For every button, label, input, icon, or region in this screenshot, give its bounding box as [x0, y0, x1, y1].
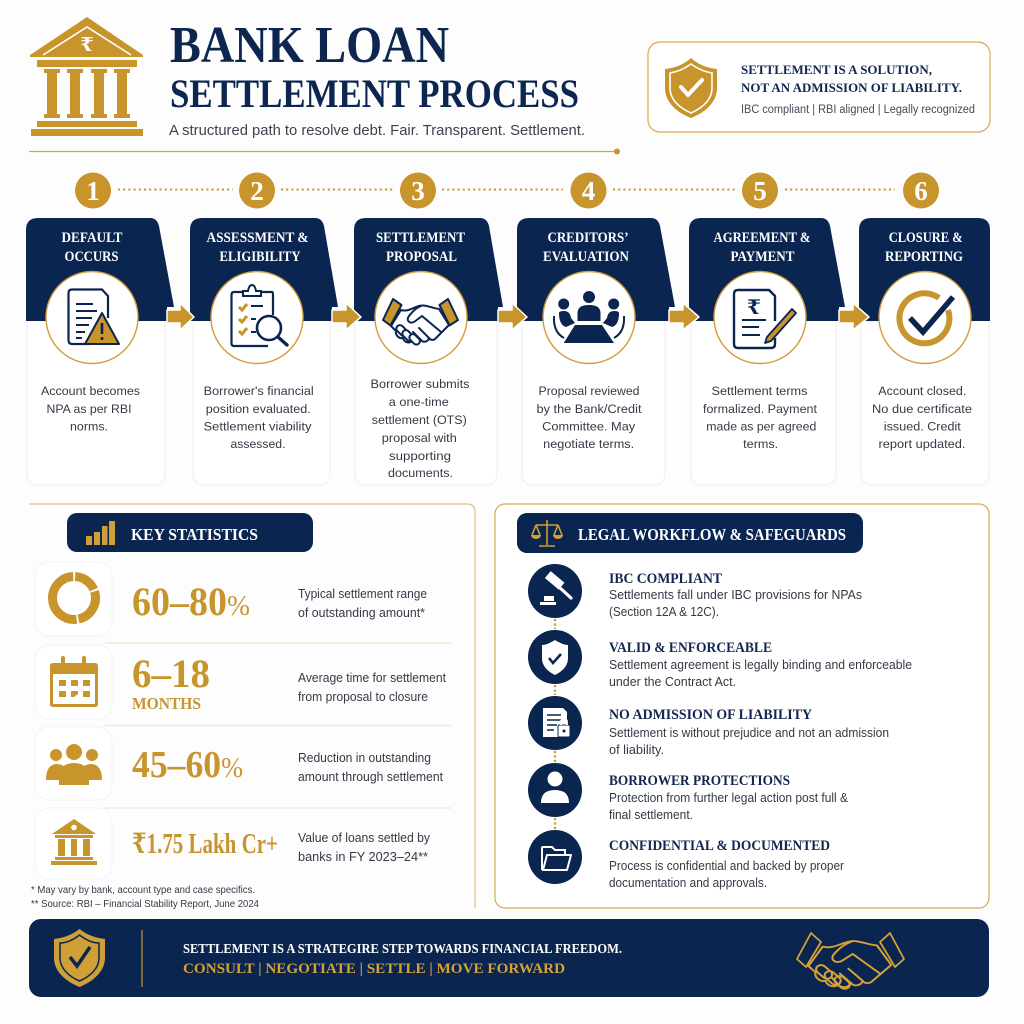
stat: settlement range: of outstanding amount* — [298, 606, 425, 620]
stat: average time — [35, 645, 447, 719]
panel: step 1 default occurs: norms. — [70, 420, 108, 434]
stat: value settled: ₹1.75 Lakh Cr+ — [132, 829, 278, 860]
stat: reduction: 45–60% — [132, 744, 243, 786]
icon: person — [541, 772, 569, 803]
item: IBC compliant: (Section 12A & 12C). — [609, 605, 719, 619]
item: IBC compliant: IBC COMPLIANT — [609, 571, 722, 587]
stat: average time: Average time for settlement — [298, 671, 447, 685]
panel: step 3 settlement proposal: proposal with — [382, 431, 457, 445]
panel: step 3 settlement proposal: settlement (OTS) — [372, 413, 467, 427]
icon: donut — [53, 577, 96, 619]
icon: gold shield — [665, 58, 717, 118]
panel: step 6 closure and reporting: report updated. — [878, 437, 966, 451]
panel: step 1 default occurs: OCCURS — [64, 249, 118, 265]
item: confidential and documented: Process is confidential and backed by proper — [609, 859, 844, 873]
banner — [29, 919, 989, 997]
panel: step 3 settlement proposal: a one-time — [389, 395, 449, 409]
stat: settlement range: 60–80% — [132, 579, 250, 624]
panel: step 5 agreement and payment: terms. — [743, 437, 778, 451]
icon: banner shield — [54, 929, 105, 987]
panel: step 6 closure and reporting: REPORTING — [885, 249, 963, 265]
item: valid and enforceable — [528, 630, 912, 689]
panel: step 4 creditors evaluation: Committee. May — [542, 420, 636, 434]
step numbers — [75, 172, 939, 208]
step numbers: 2 — [250, 176, 264, 206]
icon: rupee document with pen: ₹ — [747, 297, 761, 319]
panel: step 5 agreement and payment: made as per agreed — [706, 420, 816, 434]
banner: SETTLEMENT IS A STRATEGIRE STEP TOWARDS FINANCIAL FREEDOM. — [183, 942, 622, 957]
item: borrower protections: final settlement. — [609, 808, 693, 822]
panel: step 6 closure and reporting — [859, 218, 990, 485]
stat: reduction: amount through settlement — [298, 770, 444, 784]
panel: step 3 settlement proposal: documents. — [388, 466, 453, 480]
item: borrower protections — [528, 763, 849, 822]
icon: meeting table — [554, 291, 624, 343]
item: valid and enforceable: VALID & ENFORCEABLE — [609, 640, 772, 656]
panel: step 4 creditors evaluation: negotiate terms. — [543, 437, 634, 451]
title: SETTLEMENT PROCESS — [170, 71, 579, 116]
stat: average time: MONTHS — [132, 694, 201, 713]
icon: small bank — [51, 819, 97, 865]
panel: step 2 assessment: ASSESSMENT & — [206, 230, 308, 246]
panel: step 3 settlement proposal — [354, 218, 503, 485]
icon: clipboard and magnifier — [232, 285, 287, 346]
stat: settlement range: Typical settlement range — [298, 587, 427, 601]
icon: check in ring — [899, 293, 953, 343]
callout: settlement is a solution — [648, 42, 990, 132]
item: confidential and documented: CONFIDENTIAL & DOCUMENTED — [609, 838, 830, 854]
item: IBC compliant: Settlements fall under IBC provisions for NPAs — [609, 588, 862, 602]
step numbers: 5 — [753, 176, 767, 206]
panel: step 1 default occurs: NPA as per RBI — [46, 402, 132, 416]
panel: step 5 agreement and payment: PAYMENT — [730, 249, 795, 265]
item: borrower protections: Protection from further legal action post full & — [609, 791, 849, 805]
panel: step 4 creditors evaluation: EVALUATION — [543, 249, 629, 265]
icon: bank logo — [30, 17, 143, 136]
panel: step 1 default occurs: DEFAULT — [62, 230, 123, 246]
panel: step 6 closure and reporting: Account closed. — [878, 384, 966, 398]
item: confidential and documented: documentation and approvals. — [609, 876, 767, 890]
callout: settlement is a solution: NOT AN ADMISSION OF LIABILITY. — [741, 80, 962, 95]
stat: reduction — [35, 727, 444, 800]
panel: step 3 settlement proposal: SETTLEMENT — [376, 230, 465, 246]
panel: step 2 assessment: Settlement viability — [204, 420, 312, 434]
icon: calendar — [50, 658, 98, 707]
panel: step 6 closure and reporting: CLOSURE & — [889, 230, 963, 246]
item: borrower protections: BORROWER PROTECTIONS — [609, 773, 790, 789]
icon: rupee document with pen — [734, 290, 796, 348]
stat: value settled — [35, 808, 431, 879]
panel: step 2 assessment: assessed. — [230, 437, 286, 451]
item: valid and enforceable: under the Contract Act. — [609, 675, 736, 689]
item: no admission of liability — [528, 696, 889, 757]
panel: step 1 default occurs — [26, 218, 174, 485]
step numbers: 1 — [86, 176, 100, 206]
panel: step 2 assessment — [190, 218, 338, 485]
icon: handshake — [383, 299, 458, 346]
footnotes: ** Source: RBI – Financial Stability Report, June 2024 — [31, 899, 260, 910]
heading: key statistics: KEY STATISTICS — [131, 525, 258, 544]
header rule — [29, 148, 620, 154]
heading: legal workflow — [517, 513, 863, 553]
arrows between steps — [167, 303, 869, 330]
title: BANK LOAN — [170, 17, 449, 74]
step numbers: 4 — [582, 176, 595, 206]
item: no admission of liability: Settlement is without prejudice and not an admission — [609, 726, 889, 740]
panel: step 2 assessment: position evaluated. — [206, 402, 311, 416]
heading: key statistics — [67, 513, 313, 552]
footnotes — [31, 885, 260, 910]
heading: legal workflow: LEGAL WORKFLOW & SAFEGUARDS — [578, 525, 846, 544]
panel: step 6 closure and reporting: issued. Credit — [884, 420, 961, 434]
panel: step 2 assessment: Borrower's financial — [204, 384, 314, 398]
icon: document with lock — [543, 708, 570, 737]
panel: step 4 creditors evaluation — [517, 218, 675, 485]
item: valid and enforceable: Settlement agreement is legally binding and enforceable — [609, 658, 912, 672]
item: no admission of liability: NO ADMISSION OF LIABILITY — [609, 707, 812, 723]
step numbers: 3 — [411, 176, 425, 206]
panel: step 5 agreement and payment — [689, 218, 845, 485]
panel: step 1 default occurs: Account becomes — [41, 384, 140, 398]
icon: people — [46, 744, 102, 785]
stat: settlement range — [35, 562, 427, 636]
icon: bank logo: ₹ — [80, 35, 94, 56]
title — [170, 17, 579, 116]
stat: reduction: Reduction in outstanding — [298, 751, 431, 765]
icon: shield check — [542, 640, 568, 675]
stat: average time: from proposal to closure — [298, 690, 428, 704]
icon: document with warning — [68, 290, 119, 344]
panel: step 3 settlement proposal: PROPOSAL — [386, 249, 457, 265]
item: IBC compliant — [528, 564, 862, 619]
stat: average time: 6–18 — [132, 651, 210, 696]
dotted connector between steps — [118, 188, 895, 190]
panel: step 4 creditors evaluation: CREDITORS’ — [548, 230, 628, 246]
item: no admission of liability: of liability. — [609, 743, 664, 757]
icon: folder — [542, 847, 571, 870]
callout: settlement is a solution: SETTLEMENT IS A SOLUTION, — [741, 62, 932, 77]
step numbers: 6 — [914, 176, 928, 206]
banner: CONSULT | NEGOTIATE | SETTLE | MOVE FORWARD — [183, 961, 565, 977]
panel: step 5 agreement and payment: AGREEMENT & — [714, 230, 810, 246]
panel: step 4 creditors evaluation: Proposal reviewed — [538, 384, 640, 398]
panel: step 5 agreement and payment: Settlement terms — [712, 384, 808, 398]
subtitle: A structured path to resolve debt. Fair. Transparent. Settlement. — [169, 122, 585, 139]
item: confidential and documented — [528, 830, 844, 890]
panel: legal workflow and safeguards — [495, 504, 989, 908]
panel: step 2 assessment: ELIGIBILITY — [220, 249, 301, 265]
panel: step 3 settlement proposal: Borrower submits — [370, 377, 470, 391]
panel: step 6 closure and reporting: No due certificate — [872, 402, 972, 416]
icon: gavel — [540, 571, 571, 605]
panel: step 3 settlement proposal: supporting — [389, 449, 451, 463]
footnotes: * May vary by bank, account type and case specifics. — [31, 885, 255, 896]
icon: banner handshake — [797, 933, 904, 991]
panel: step 4 creditors evaluation: by the Bank/Credit — [536, 402, 642, 416]
callout: settlement is a solution: IBC compliant | RBI aligned | Legally recognized — [741, 104, 975, 116]
panel: step 5 agreement and payment: formalized. Payment — [703, 402, 818, 416]
stat: value settled: banks in FY 2023–24** — [298, 850, 428, 864]
panel: key statistics — [29, 504, 475, 910]
stat: value settled: Value of loans settled by — [298, 831, 431, 845]
